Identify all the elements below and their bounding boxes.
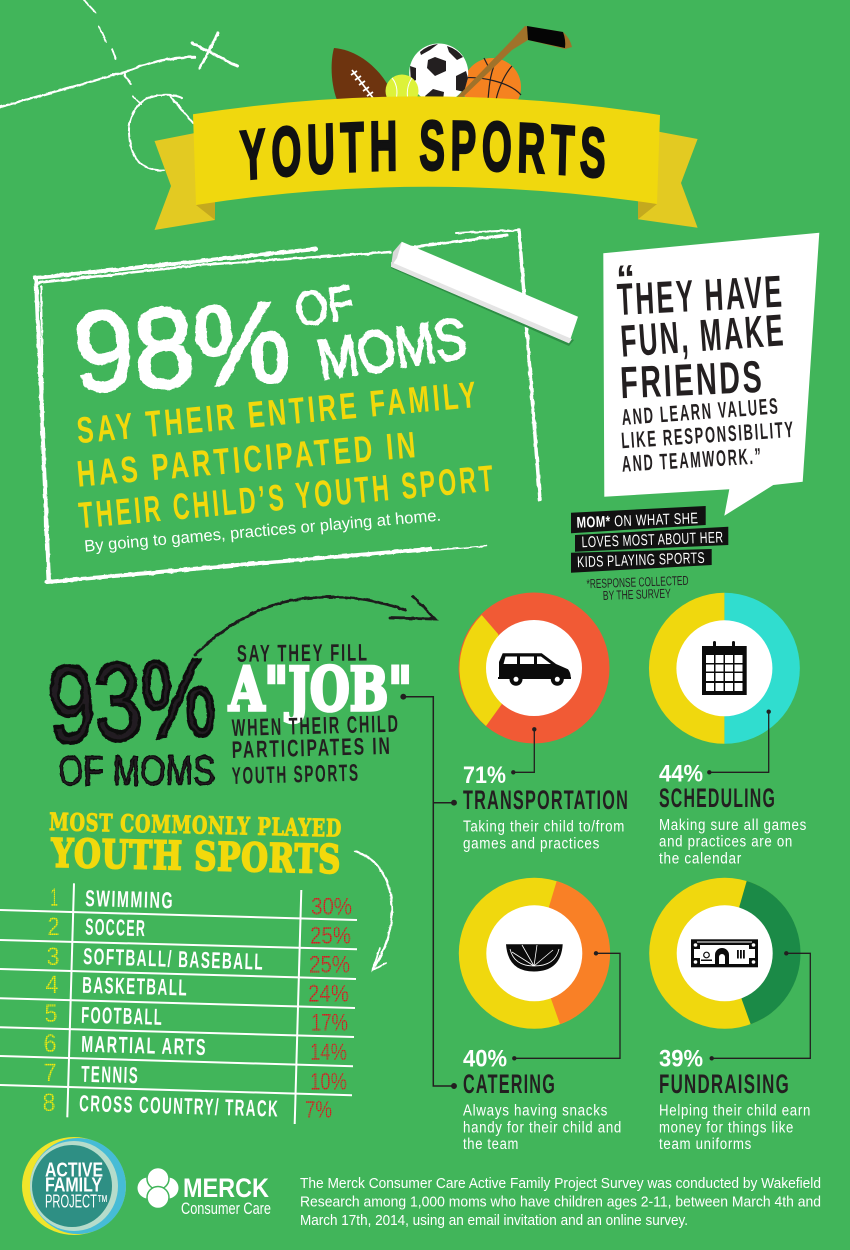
percentages: 30% (311, 894, 352, 920)
moms: MOMS (313, 305, 471, 393)
of moms: OF MOMS (58, 747, 215, 794)
attribution labels: LOVES MOST ABOUT HER (581, 529, 724, 551)
title banner (154, 96, 698, 230)
rank numbers (42, 884, 60, 1117)
donut chart 39% (649, 878, 800, 1029)
stat: 40% (463, 1046, 507, 1073)
attribution labels (571, 506, 728, 603)
logo: active family project (22, 1137, 126, 1235)
headline: SAY THEIR ENTIRE FAMILY (75, 374, 481, 451)
donut chart 40% (459, 878, 610, 1029)
of: OF (291, 276, 357, 338)
connector (513, 729, 534, 772)
description: team uniforms (659, 1136, 752, 1153)
panel: 93% of moms (45, 635, 412, 794)
when their child text: YOUTH SPORTS (231, 760, 360, 790)
donut chart 44% (649, 593, 800, 744)
icon: dollar bill (691, 939, 758, 967)
survey note (586, 573, 689, 603)
sport names: CROSS COUNTRY/ TRACK (79, 1090, 280, 1122)
connector: job to categories (401, 694, 456, 1088)
percentages: 25% (309, 951, 350, 978)
heading: CATERING (463, 1069, 556, 1099)
donut chart 71% (458, 592, 610, 744)
rank numbers: 2 (48, 913, 60, 941)
connector (709, 712, 769, 772)
icon: hockey stick (457, 26, 572, 97)
description: money for things like (659, 1119, 794, 1136)
subtext: By going to games, practices or playing at home. (83, 507, 442, 556)
chalk frame (35, 230, 540, 582)
headline: HAS PARTICIPATED IN (75, 424, 420, 495)
panel: 98% of moms chalkboard (35, 230, 578, 582)
icon: basketball (463, 58, 521, 116)
rank numbers: 1 (50, 884, 58, 912)
quote mark: “ (615, 258, 636, 301)
percentages: 7% (305, 1097, 332, 1124)
sport names (79, 885, 280, 1122)
description: the team (463, 1136, 519, 1153)
stat: 44% (659, 761, 703, 788)
when their child text: WHEN THEIR CHILD (231, 711, 400, 742)
98%: 98% (71, 279, 293, 417)
logo: merck consumer care: Consumer Care (181, 1199, 271, 1218)
logo: merck consumer care: MERCK (183, 1173, 269, 1203)
arrow: chalk down to table (355, 852, 392, 970)
icon: merck mark (138, 1168, 178, 1208)
stat: 39% (659, 1046, 703, 1073)
when their child text: PARTICIPATES IN (231, 733, 392, 764)
percentages: 14% (310, 1039, 347, 1066)
survey footnote: Research among 1,000 moms who have children ages 2-11, between March 4th and (300, 1194, 821, 1211)
icon: lime slice (506, 944, 563, 972)
icon: tennis ball (386, 74, 418, 108)
icon: calendar (702, 641, 747, 695)
attribution labels: KIDS PLAYING SPORTS (577, 550, 705, 571)
stat: 71% (463, 762, 506, 789)
survey note: BY THE SURVEY (603, 586, 671, 603)
survey footnote: March 17th, 2014, using an email invitation and an online survey. (300, 1212, 688, 1229)
description (659, 817, 807, 867)
sport names: MARTIAL ARTS (81, 1031, 208, 1060)
heading: most commonly played: MOST COMMONLY PLAYED (49, 807, 342, 843)
say they fill: SAY THEY FILL (237, 640, 369, 668)
panel: transportation (458, 592, 629, 852)
survey note: *RESPONSE COLLECTED (586, 573, 689, 591)
panel: speech bubble quote (603, 233, 819, 516)
description: handy for their child and (463, 1119, 622, 1136)
sport names: BASKETBALL (82, 972, 189, 1000)
heading: TRANSPORTATION (463, 785, 629, 815)
description (463, 1103, 622, 1153)
sport names: FOOTBALL (81, 1002, 164, 1030)
arrow: black chalk arc (195, 596, 435, 655)
logo: active family project: PROJECT™ (45, 1192, 108, 1212)
rank numbers: 8 (42, 1089, 56, 1117)
when their child text (231, 711, 400, 790)
percentages: 10% (310, 1068, 347, 1095)
connector (514, 953, 620, 1058)
description: and practices are on (659, 834, 793, 851)
icon: football (332, 48, 395, 100)
icon: van (498, 653, 571, 686)
quote large text (616, 266, 787, 408)
description: Making sure all games (659, 817, 807, 834)
description: Always having snacks (463, 1103, 608, 1120)
headline: THEIR CHILD’S YOUTH SPORT (77, 457, 498, 536)
icon: soccer ball (409, 44, 468, 102)
description: the calendar (659, 850, 742, 867)
description: games and practices (463, 835, 600, 852)
icon: chalk stick (391, 242, 578, 346)
headline (75, 374, 498, 536)
heading: youth sports: YOUTH SPORTS (50, 830, 342, 883)
logo: active family project: FAMILY (45, 1175, 103, 1197)
connector (712, 953, 810, 1058)
chalk play diagram (0, 0, 237, 170)
rank numbers: 4 (46, 971, 59, 999)
quote small text (620, 393, 796, 477)
rank numbers: 3 (46, 943, 60, 971)
sport names: SOFTBALL/ BASEBALL (83, 943, 265, 975)
table grid (0, 883, 357, 1124)
percentages: 25% (310, 922, 351, 949)
panel: fundraising (649, 878, 811, 1153)
title: YOUTH SPORTS (238, 119, 605, 180)
rank numbers: 5 (44, 1000, 58, 1028)
percentages (305, 894, 352, 1124)
description (659, 1103, 811, 1153)
description: Helping their child earn (659, 1103, 811, 1120)
sport names: SOCCER (85, 914, 147, 941)
93%: 93% (45, 635, 219, 767)
description: Taking their child to/from (463, 819, 625, 836)
a job: A"JOB" (228, 655, 412, 725)
panel: scheduling (649, 593, 807, 867)
logo: merck consumer care (138, 1168, 271, 1218)
description (463, 819, 625, 852)
rank numbers: 6 (44, 1030, 56, 1058)
quote large text: FRIENDS (619, 351, 765, 408)
sport names: TENNIS (81, 1061, 140, 1088)
sport names: SWIMMING (85, 885, 175, 913)
panel: most commonly played sports (0, 807, 392, 1124)
sports balls and hockey stick (332, 26, 572, 116)
attribution labels: MOM* ON WHAT SHE (576, 510, 699, 532)
percentages: 17% (311, 1010, 348, 1037)
panel: catering (459, 878, 622, 1153)
rank numbers: 7 (44, 1059, 56, 1087)
logo: active family project: ACTIVE (45, 1160, 103, 1182)
percentages: 24% (308, 980, 349, 1007)
survey footnote (300, 1175, 821, 1229)
